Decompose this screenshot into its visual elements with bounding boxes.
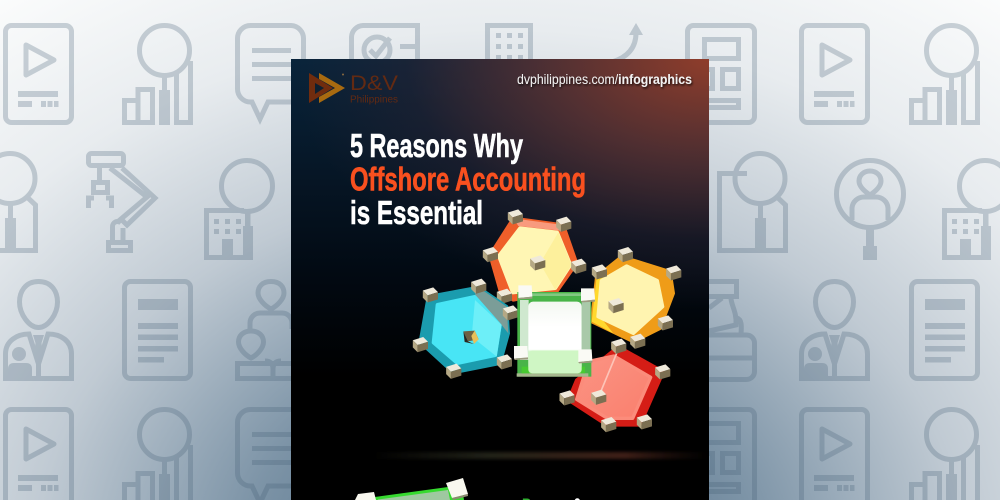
icon: document magnifier, left edge <box>0 154 36 253</box>
icon: building magnifier, right edge <box>942 160 1000 260</box>
icon: chat bubble, row 1 <box>237 25 304 119</box>
icon: checklist document <box>352 26 420 63</box>
icon: building magnifier <box>204 160 272 260</box>
icon: desk person, right of panel <box>690 282 755 380</box>
icon: growth arrow <box>612 23 643 62</box>
icon: layout document, row 4 <box>688 410 754 500</box>
panel: infographic cover <box>291 59 709 500</box>
icon: robot arm <box>88 154 155 250</box>
icon: text document, row 3 <box>124 282 190 378</box>
gem: green <box>514 285 595 377</box>
icon: magnifier chart, row 1 <box>124 26 190 125</box>
icon: person in suit, row 3 <box>6 282 72 381</box>
gem: red <box>559 339 670 432</box>
title <box>350 128 586 232</box>
icon: play tablet, row 4 <box>6 410 72 500</box>
icon: magnifier chart, row 1 right <box>912 26 978 125</box>
title: Offshore Accounting <box>350 162 586 198</box>
logo: Philippines <box>350 94 398 106</box>
title: 5 Reasons Why <box>350 128 523 165</box>
logo <box>309 71 399 106</box>
icon: office building <box>488 26 530 76</box>
icon: person in suit, row 3 right <box>802 282 868 381</box>
gem: partial green at bottom <box>355 478 468 500</box>
icon: document magnifier, right <box>720 154 786 253</box>
gem cluster <box>413 209 681 432</box>
icon: play tablet, row 1 <box>6 26 72 122</box>
icon: person magnifier <box>836 160 904 260</box>
gem: cyan <box>413 279 518 379</box>
icon: play tablet, row 1 right <box>802 26 868 122</box>
lens flare <box>370 452 709 459</box>
website url: dvphilippines.com/infographics <box>517 71 692 87</box>
icon: magnifier chart, row 4 <box>124 410 190 500</box>
title: is Essential <box>350 195 483 232</box>
icon: magnifier chart, row 4 right <box>912 410 978 500</box>
icon: seated group <box>238 282 312 378</box>
gem: amber <box>592 247 681 349</box>
icon: text document, row 3 right <box>912 282 978 378</box>
icon: layout document, row 1 <box>688 26 754 122</box>
gem: orange-yellow <box>483 209 586 304</box>
logo: D&V <box>350 71 399 95</box>
icon: chat bubble, row 4 <box>237 409 304 500</box>
icon: play tablet, row 4 right <box>802 410 868 500</box>
